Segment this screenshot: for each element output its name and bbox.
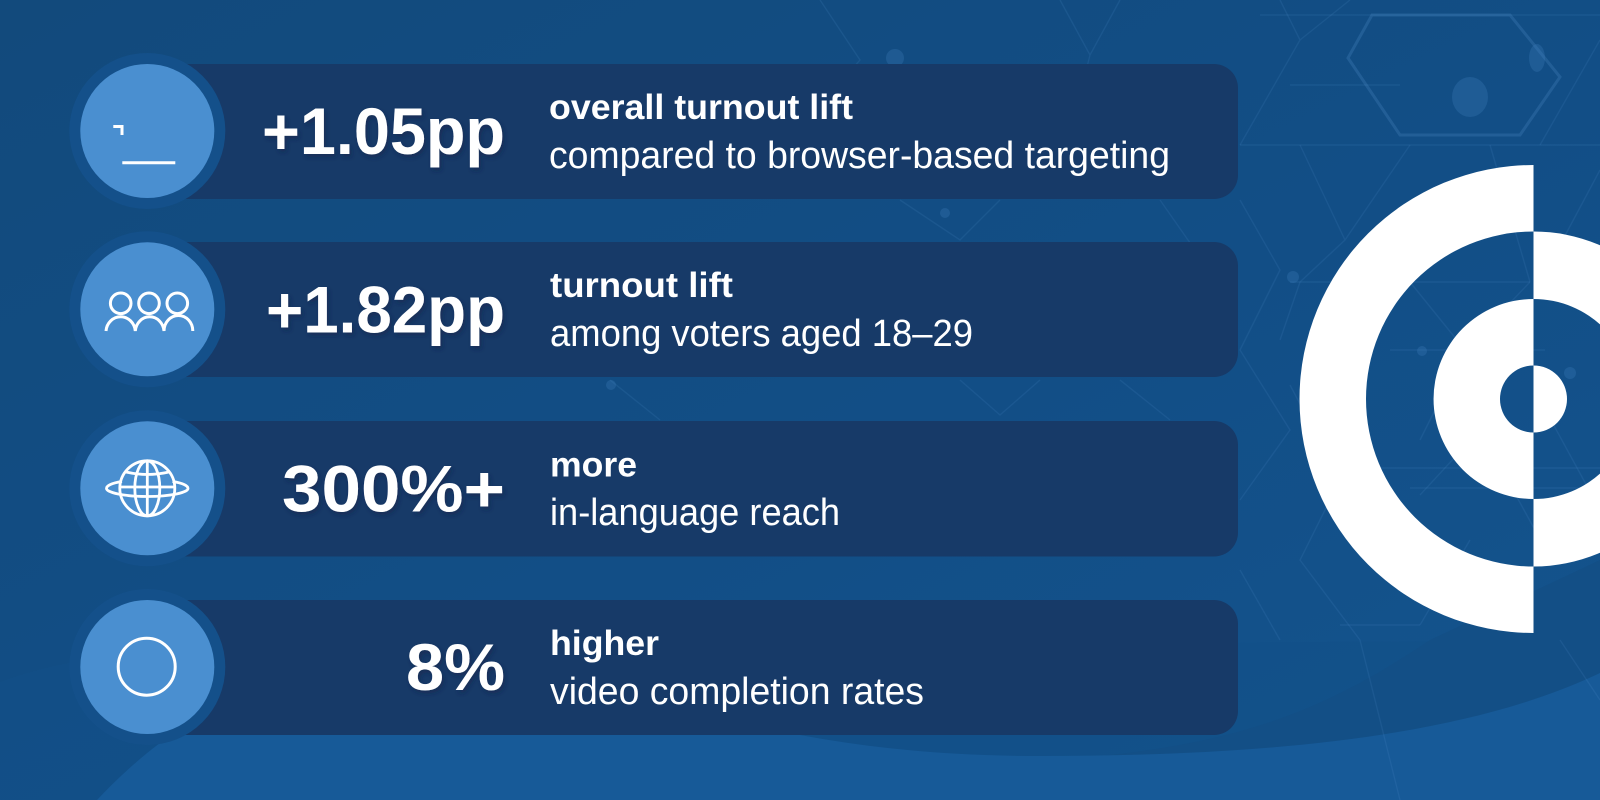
logo: concentric half rings bbox=[1300, 165, 1600, 633]
panel background bbox=[147, 64, 1238, 199]
panel background bbox=[147, 242, 1238, 377]
badge circle bbox=[69, 589, 225, 745]
label: more: more bbox=[550, 445, 637, 485]
description: in-language reach: in-language reach bbox=[550, 492, 840, 534]
panel: video completion rates bbox=[69, 589, 1238, 745]
label: higher: higher bbox=[550, 623, 659, 663]
label: turnout lift: turnout lift bbox=[550, 265, 733, 305]
panel background bbox=[147, 421, 1238, 556]
icon: three people bbox=[106, 293, 193, 331]
icon: circle outline bbox=[118, 638, 175, 695]
stat: +1.82pp: +1.82pp bbox=[266, 273, 505, 347]
icon: cursor and underline bbox=[113, 126, 175, 163]
stat: 8%: 8% bbox=[406, 630, 505, 704]
badge circle bbox=[69, 410, 225, 566]
stat: 300%+: 300%+ bbox=[282, 452, 505, 526]
badge circle bbox=[69, 231, 225, 387]
panel: overall turnout lift bbox=[69, 53, 1238, 209]
panel background bbox=[147, 600, 1238, 735]
badge circle bbox=[69, 53, 225, 209]
description: compared to browser-based targeting: compared to browser-based targeting bbox=[549, 135, 1170, 177]
panel: in-language reach bbox=[69, 410, 1238, 566]
icon: globe with ring bbox=[106, 461, 188, 516]
stat: +1.05pp: +1.05pp bbox=[262, 94, 505, 168]
panel: turnout lift among young voters bbox=[69, 231, 1238, 387]
label: overall turnout lift: overall turnout lift bbox=[549, 87, 853, 127]
description: video completion rates: video completion rates bbox=[550, 671, 924, 713]
description: among voters aged 18–29: among voters aged 18–29 bbox=[550, 313, 973, 355]
